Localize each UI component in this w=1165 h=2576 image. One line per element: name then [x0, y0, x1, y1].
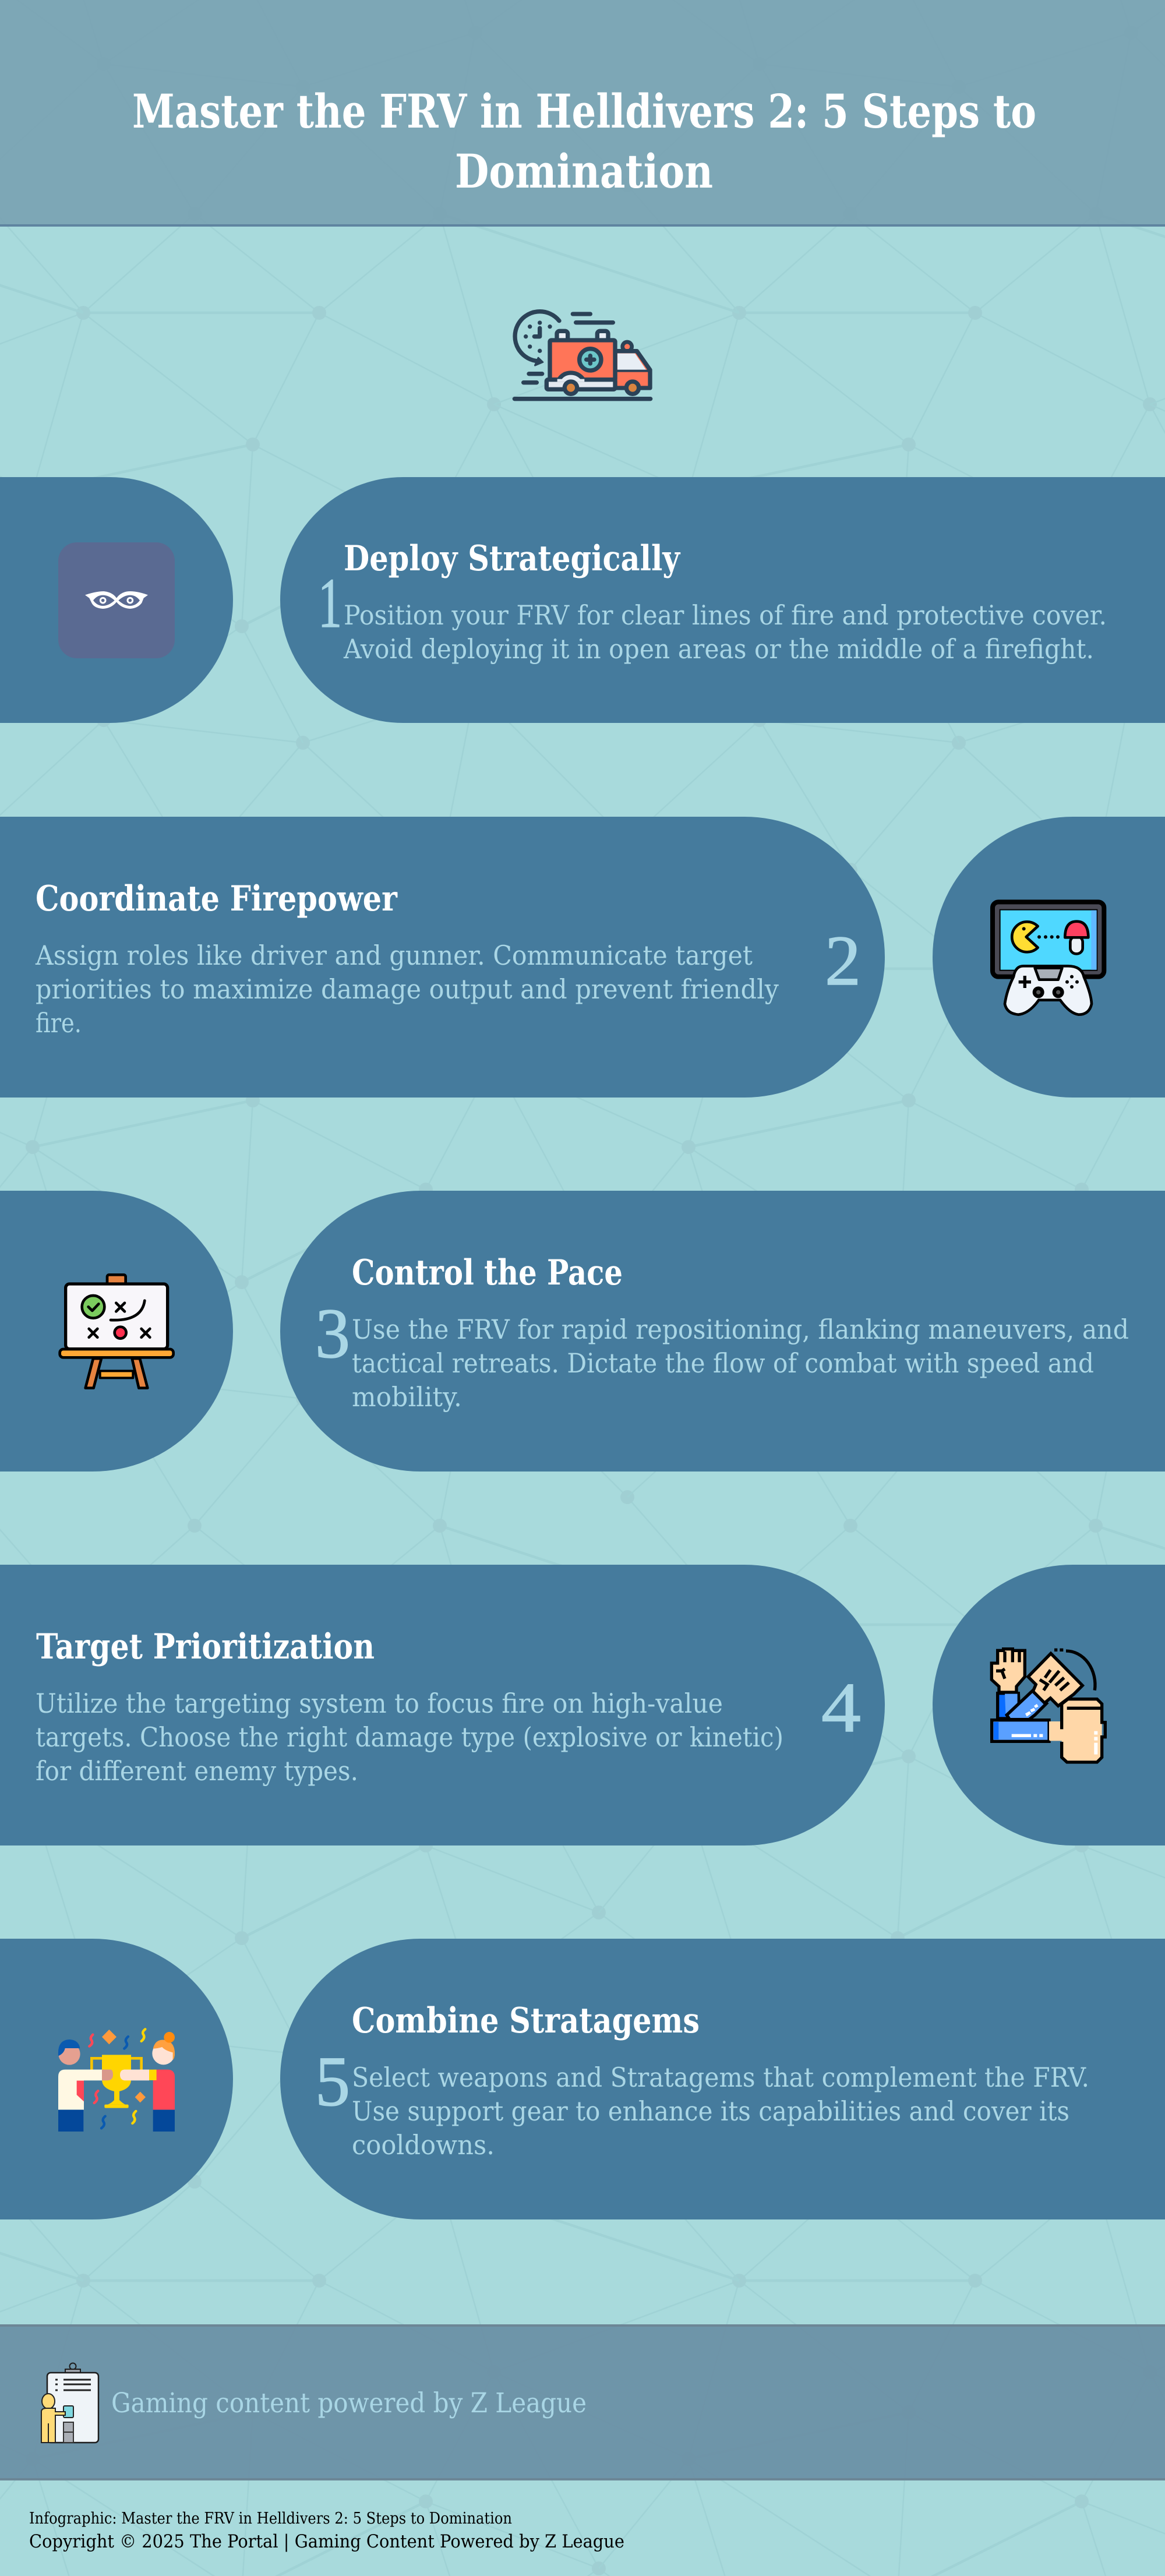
text: step 1 body: Avoid deploying it in open areas or the middle of a firefight.	[343, 633, 1094, 665]
step 5	[0, 1939, 1165, 2219]
text: step 3 body: tactical retreats. Dictate the flow of combat with speed and	[352, 1347, 1094, 1379]
text: step 5 body: cooldowns.	[352, 2129, 495, 2161]
icon: game screen and controller	[993, 902, 1104, 1015]
step 3	[0, 1191, 1165, 1472]
step 1	[0, 477, 1165, 723]
icon: two people sharing a trophy	[58, 2029, 175, 2132]
step number 3: 3	[315, 1294, 350, 1373]
panel: step 5 icon pill	[0, 1939, 233, 2219]
text: step 5 body: Use support gear to enhance its capabilities and cover its	[352, 2095, 1069, 2127]
text: step 5 body: Select weapons and Stratagems that complement the FRV.	[352, 2062, 1089, 2093]
icon: raised fists	[991, 1649, 1105, 1762]
text: powered by: Gaming content powered by Z League	[111, 2387, 587, 2419]
panel: step 2 content pill	[0, 817, 885, 1098]
footer band	[0, 2324, 1165, 2480]
icon: tactics whiteboard on easel	[60, 1275, 174, 1388]
step 2	[0, 817, 1165, 1098]
text: step 2 body: priorities to maximize damage output and prevent friendly	[36, 973, 779, 1005]
text: step 2 body: fire.	[36, 1007, 82, 1039]
panel: step 1 icon pill	[0, 477, 233, 723]
title: Domination	[455, 144, 713, 199]
panel: step 4 icon pill	[933, 1565, 1165, 1845]
icon: ambulance with clock	[514, 312, 651, 399]
step number 1: 1	[318, 564, 342, 643]
text: copyright: Copyright © 2025 The Portal | Gaming Content Powered by Z League	[29, 2531, 624, 2552]
header band with title	[0, 0, 1165, 227]
panel: step 2 icon pill	[933, 817, 1165, 1098]
text: step 4 body: for different enemy types.	[36, 1755, 358, 1787]
heading: step 2: Coordinate Firepower	[36, 878, 398, 919]
heading: step 5: Combine Stratagems	[352, 2000, 700, 2041]
heading: step 1: Deploy Strategically	[344, 538, 681, 579]
heading: step 4: Target Prioritization	[36, 1626, 375, 1667]
step number 4: 4	[821, 1668, 861, 1747]
text: step 1 body: Position your FRV for clear lines of fire and protective cover.	[344, 599, 1107, 631]
step number 5: 5	[315, 2042, 350, 2121]
text: infographic caption: Infographic: Master the FRV in Helldivers 2: 5 Steps to Domination	[29, 2510, 512, 2528]
panel: step 3 icon pill	[0, 1191, 233, 1472]
panel: step 5 content pill	[280, 1939, 1165, 2219]
text: step 4 body: targets. Choose the right damage type (explosive or kinetic)	[36, 1721, 783, 1753]
icon: clipboard with figure	[41, 2363, 98, 2443]
text: step 3 body: mobility.	[352, 1381, 462, 1413]
panel: step 1 content pill	[280, 477, 1165, 723]
icon: eyes on tile	[58, 542, 175, 658]
text: step 2 body: Assign roles like driver and gunner. Communicate target	[35, 940, 753, 971]
heading: step 3: Control the Pace	[352, 1252, 623, 1293]
step 4	[0, 1565, 1165, 1845]
step number 2: 2	[825, 922, 861, 1000]
panel: step 3 content pill	[280, 1191, 1165, 1472]
text: step 4 body: Utilize the targeting system to focus fire on high-value	[36, 1688, 723, 1719]
panel: step 4 content pill	[0, 1565, 885, 1845]
